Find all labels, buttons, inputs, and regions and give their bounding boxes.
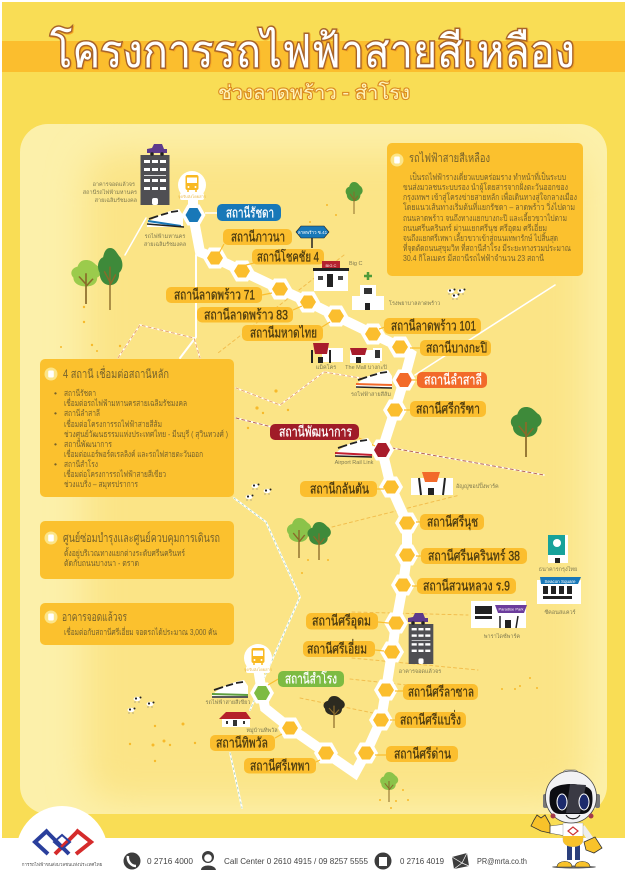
- station: Phatthanakan: สถานีพัฒนาการ: [279, 424, 352, 440]
- title band: [2, 41, 625, 72]
- station: Si Nut: สถานีศรีนุช: [427, 514, 478, 530]
- icon: Major Cineplex: อัญญู่ชอปปิ้งพาร์ค: [456, 482, 499, 490]
- icon: small green tree: [380, 772, 398, 802]
- info box: park and ride: อาคารจอดแล้วจร: [62, 610, 127, 624]
- info box: 4 interchange stations: •: [54, 459, 57, 469]
- icon: Major Cineplex: [411, 472, 499, 495]
- label: blue line train: [144, 233, 186, 248]
- station: Lat Phrao 83: สถานีลาดพร้าว 83: [204, 306, 288, 322]
- info box: 4 interchange stations: •: [54, 388, 57, 398]
- info box: 4 interchange stations: •: [54, 439, 57, 449]
- contact: phone: 0 2716 4000: [147, 857, 194, 866]
- info box: yellow line description: ถนนศรีนครินทร์ ผ่านแยกศรีนุช ศรีอุดม ศรีเอี่ยม: [403, 222, 547, 234]
- info box: depot: [40, 521, 234, 579]
- icon: bus depot north: จุดรับส่งโดยสาร: [178, 194, 207, 200]
- leader lines: [205, 213, 421, 762]
- info box: 4 interchange stations: 4 สถานี เชื่อมต่อสถานีหลัก: [63, 365, 169, 381]
- info box: 4 interchange stations: เชื่อมต่อโครงการรถไฟฟ้าสายสีเขียว: [64, 468, 166, 479]
- info box: 4 interchange stations: สถานีลำสาลี: [64, 408, 100, 418]
- contact: call center: [201, 851, 369, 870]
- label: parking building north: อาคารจอดแล้วจร: [93, 181, 135, 188]
- info box: 4 interchange stations: สถานีรัชดา: [64, 388, 96, 398]
- icon: black tree: [324, 696, 345, 728]
- station: Si Iam: สถานีศรีเอี่ยม: [307, 640, 367, 656]
- label: blue line train: รถไฟฟ้ามหานคร: [145, 233, 185, 240]
- info box: 4 interchange stations: [40, 359, 234, 497]
- station: Si Thepha: สถานีศรีเทพา: [250, 758, 310, 774]
- info box: yellow line description: [387, 143, 583, 276]
- info box: 4 interchange stations: สถานีพัฒนาการ: [64, 439, 112, 449]
- info box: park and ride: [40, 603, 234, 645]
- scattered dots: [60, 204, 538, 809]
- info box: 4 interchange stations: สถานีสำโรง: [64, 459, 98, 469]
- info box: 4 interchange stations: เชื่อมต่อแอร์พอร์ตเรลลิงค์ และรถไฟสายตะวันออก: [64, 448, 203, 459]
- icon: The Mall: The Mall บางกะปิ: [345, 364, 387, 371]
- station: Suan Luang Rama 9: สถานีสวนหลวง ร.9: [423, 578, 510, 594]
- icon: Thipphawan village house: [219, 712, 251, 727]
- info box: yellow line description: ถนนลาดพร้าว จนถึงทางแยกบางกะปิ และเลี้ยวขวาไปตาม: [403, 212, 567, 223]
- station: Lat Phrao 71: สถานีลาดพร้าว 71: [174, 286, 255, 302]
- station: Bang Kapi: สถานีบางกะปิ: [426, 340, 487, 356]
- icon: tree right: [511, 407, 542, 457]
- icon: Big C: Big C: [349, 261, 362, 267]
- icon: cows centre: [246, 484, 272, 501]
- info box: 4 interchange stations: เชื่อมต่อโครงการรถไฟฟ้าสายสีส้ม: [64, 418, 162, 429]
- station: Lam Sali: สถานีลำสาลี: [424, 372, 482, 388]
- station: Ratchada: สถานีรัชดา: [226, 204, 274, 220]
- info box: yellow line description: โดยแนวเส้นทางเริ่มต้นที่แยกรัชดา – ลาดพร้าว วิ่งไปตาม: [403, 201, 575, 212]
- info box: park and ride: เชื่อมต่อกับสถานีศรีเอี่ยม จอดรถได้ประมาณ 3,000 คัน: [64, 626, 217, 637]
- icon: Big C: BIG C: [326, 263, 337, 268]
- label: parking building north: สายเฉลิมรัชมงคล: [95, 197, 137, 204]
- icon: bus depot south: จุดรับส่งโดยสาร: [244, 667, 273, 673]
- logo: MRTA: [16, 806, 108, 884]
- roads: [118, 218, 555, 808]
- icon: Paradise Park: พาราไดซ์พาร์ค: [484, 633, 520, 640]
- icon: blue line train: [147, 209, 184, 227]
- label: green line train: รถไฟฟ้าสายสีเขียว: [206, 699, 250, 706]
- station: Phawana: สถานีภาวนา: [231, 228, 285, 244]
- icon: Seacon Square: [537, 577, 581, 616]
- contact: email: [452, 853, 527, 869]
- icon: dark tree: [98, 248, 122, 310]
- icon: light tree: [71, 260, 101, 304]
- label: Thipphawan village: หมู่บ้านทิพวัล: [246, 727, 278, 734]
- station: Si Dan: สถานีศรีด่าน: [394, 746, 451, 762]
- label: parking building north: [83, 181, 137, 204]
- subtitle: ช่วงลาดพร้าว - สำโรง: [218, 81, 410, 104]
- icon: Seacon Square: ซีคอนสแควร์: [544, 609, 576, 616]
- icon: Seacon Square: Seacon Square: [544, 579, 576, 584]
- station: Si La Salle: [403, 684, 478, 700]
- contact: fax: [374, 852, 445, 870]
- stations hexagons: [182, 204, 419, 764]
- info box: depot: ตัดกับถนนบางนา - ตราด: [64, 558, 139, 568]
- station: Mahat Thai: [242, 324, 323, 341]
- icon: Paradise Park: Paradise Park: [498, 606, 524, 612]
- contact: email: PR@mrta.co.th: [477, 857, 527, 866]
- station: Si Bearing: สถานีศรีแบริ่ง: [400, 710, 461, 728]
- station: Klantan: สถานีกลันตัน: [310, 480, 369, 496]
- label: blue line train: สายเฉลิมรัชมงคล: [144, 241, 186, 248]
- station: Si La Salle: สถานีศรีลาซาล: [408, 684, 474, 700]
- info box: yellow line description: รถไฟฟ้าสายสีเหลือง: [409, 151, 490, 165]
- station: Thipphawan: สถานีทิพวัล: [216, 734, 268, 750]
- icon: Paradise Park: [471, 601, 527, 640]
- station: Lat Phrao 101: สถานีลาดพร้าว 101: [391, 318, 476, 334]
- contact: fax: 0 2716 4019: [400, 857, 445, 866]
- station: Si Udom: สถานีศรีอุดม: [312, 612, 371, 630]
- label: parking building south: อาคารจอดแล้วจร: [399, 668, 441, 675]
- station: Mahat Thai: สถานีมหาดไทย: [250, 324, 317, 340]
- info box: 4 interchange stations: •: [54, 408, 57, 418]
- icon: bus depot south: [244, 644, 273, 673]
- label: airport rail link: Airport Rail Link: [335, 460, 374, 466]
- info box: 4 interchange stations: ช่วงศูนย์วัฒนธรรมแห่งประเทศไทย - มีนบุรี ( สุวินทวงศ์ ): [64, 429, 228, 440]
- station: Si Bearing: [395, 710, 466, 728]
- icon: airport rail link train: [335, 438, 372, 457]
- mascot: [531, 770, 602, 868]
- station: Lat Phrao 101: [384, 318, 481, 334]
- info box: yellow line description: 30.4 กิโลเมตร มีสถานีรถไฟฟ้าจำนวน 23 สถานี: [403, 253, 544, 263]
- icon: bus depot north: [178, 171, 207, 200]
- label: orange line train: รถไฟฟ้าสายสีส้ม: [351, 391, 391, 398]
- icon: cows south: [128, 696, 154, 714]
- icon: hospital: โรงพยาบาลลาดพร้าว: [389, 299, 440, 307]
- train line: [193, 190, 411, 773]
- contact: call center: Call Center 0 2610 4915 / 09 8257 5555: [224, 857, 369, 866]
- logo: MRTA: การรถไฟฟ้าขนส่งมวลชนแห่งประเทศไทย: [22, 862, 103, 867]
- station: Srinagarindra 38: สถานีศรีนครินทร์ 38: [428, 548, 520, 564]
- info box: depot: ตั้งอยู่บริเวณทางแยกต่างระดับศรีนครินทร์: [64, 547, 185, 559]
- icon: Krungthai bank: [539, 535, 577, 573]
- station: Chokchai 4: สถานีโชคชัย 4: [257, 248, 319, 264]
- info box: yellow line description: ที่จุดตัดถนนสุขุมวิท ที่สถานีสำโรง มีระยะทางรวมประมาณ: [403, 242, 571, 254]
- icon: Big C: [313, 261, 362, 291]
- info box: depot: ศูนย์ซ่อมบำรุงและศูนย์ควบคุมการเดินรถ: [63, 531, 220, 546]
- icon: tree pair: [287, 518, 331, 560]
- icon: Makro: [311, 343, 343, 371]
- info box: yellow line description: กรุงเทพฯ เข้าสู่โครงข่ายสายหลัก เพื่อเดินทางสู่ใจกลางเมือง: [403, 191, 577, 203]
- icon: parking building north: [140, 144, 170, 205]
- info box: 4 interchange stations: เชื่อมต่อรถไฟฟ้ามหานครสายเฉลิมรัชมงคล: [64, 397, 187, 408]
- icon: Krungthai bank: ธนาคารกรุงไทย: [539, 566, 577, 573]
- contact: phone: [124, 852, 194, 870]
- icon: cows north: [448, 288, 466, 300]
- info box: 4 interchange stations: ช่วงแบริ่ง – สมุทรปราการ: [64, 478, 138, 490]
- icon: green line train: [212, 680, 248, 698]
- info box: yellow line description: จนถึงแยกศรีเทพา เลี้ยวขวาเข้าสู่ถนนเทพารักษ์ ไปสิ้นสุด: [403, 232, 558, 244]
- icon: parking building south: [408, 613, 433, 664]
- station: Si Kritha: สถานีศรีกรีฑา: [416, 400, 480, 416]
- title: โครงการรถไฟฟ้าสายสีเหลือง: [50, 26, 575, 77]
- station: Samrong: สถานีสำโรง: [285, 670, 337, 686]
- icon: hospital: [352, 272, 440, 310]
- panel: map background: [20, 124, 607, 814]
- icon: orange line train: [356, 370, 392, 388]
- icon: The Mall: [345, 348, 387, 371]
- icon: road sign: [296, 226, 329, 248]
- footer: white strip: [0, 838, 625, 884]
- info box: yellow line description: เป็นรถไฟฟ้ารางเดี่ยวแบบคร่อมราง ทำหน้าที่เป็นระบบ: [410, 171, 566, 182]
- station: Ratchada: [217, 204, 281, 221]
- label: parking building north: สถานีรถไฟฟ้ามหานคร: [83, 189, 137, 196]
- icon: small tree: [346, 182, 363, 214]
- info box: yellow line description: ขนส่งมวลชนระบบรอง นำผู้โดยสารจากฝั่งตะวันออกของ: [403, 181, 568, 193]
- icon: road sign: ลาดพร้าว ซ.41: [298, 230, 328, 235]
- icon: Makro: แม็คโคร: [316, 363, 336, 371]
